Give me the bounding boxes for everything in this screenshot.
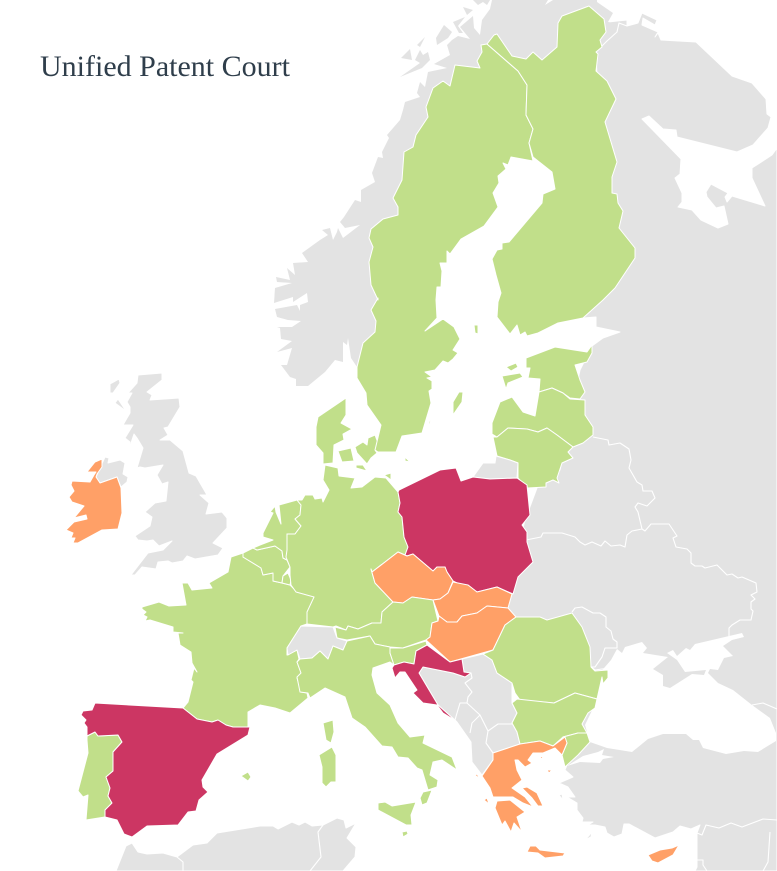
- border: Morocco and Algeria: [177, 857, 183, 871]
- island: Mallorca: [241, 772, 251, 781]
- country: Austria: [335, 597, 438, 648]
- island: Hiiumaa: [506, 363, 518, 371]
- island: Lemnos: [540, 756, 543, 759]
- island: Sicily: [378, 802, 416, 825]
- country: Sweden: [357, 44, 533, 462]
- country: Czech Republic: [371, 552, 453, 603]
- island: Rugen: [384, 473, 391, 480]
- island: Saaremaa: [502, 373, 523, 389]
- island: Rhodes area: [585, 832, 592, 840]
- fjord notch: [545, 0, 553, 5]
- island: Senja group: [453, 17, 465, 33]
- island: Aegean east: [559, 794, 563, 800]
- country: Hungary: [426, 606, 516, 662]
- island: Corfu: [475, 774, 480, 779]
- border: Algeria and Tunisia: [310, 825, 323, 871]
- country: Italy: [297, 636, 457, 825]
- island: Kefalonia: [484, 798, 489, 804]
- island: Corsica: [323, 720, 334, 743]
- border: Moldova: [572, 607, 617, 670]
- country: Finland: [474, 6, 635, 336]
- border: Bosnia and Serbia: [465, 673, 480, 733]
- island: Troms group: [463, 7, 473, 15]
- border: Montenegro: [455, 703, 467, 720]
- country: Romania: [483, 613, 608, 703]
- island: Sardinia: [319, 747, 336, 787]
- Sea of Marmara: [567, 749, 614, 766]
- country: Greece: [475, 737, 567, 858]
- border: Turkey and Caucasus: [752, 703, 777, 709]
- country: Denmark: [316, 398, 381, 471]
- country: Lithuania: [493, 428, 573, 488]
- border: Belarus east: [593, 437, 655, 529]
- island: Bornholm: [405, 457, 410, 462]
- country: Norway: [274, 0, 627, 386]
- island: Hebrides south: [115, 399, 126, 411]
- island: Norwegian coast small: [417, 37, 425, 47]
- country: France: [142, 553, 315, 727]
- island: Zealand: [355, 435, 381, 464]
- region: European Turkey: [562, 733, 590, 767]
- island: Crete: [527, 846, 565, 858]
- region: North Africa: [116, 818, 356, 871]
- region: Western Balkans: [419, 654, 520, 775]
- region: Northern Ireland: [96, 457, 128, 487]
- border: Lebanon: [697, 860, 707, 871]
- country: Ireland: [66, 459, 122, 543]
- country: Cyprus: [648, 845, 679, 863]
- island: Malta: [402, 831, 408, 837]
- region: Calabria tip: [420, 790, 432, 805]
- country: Slovakia: [433, 582, 512, 622]
- border: Albania and Macedonia: [486, 731, 493, 753]
- country: Bulgaria: [512, 693, 597, 746]
- country: Luxembourg: [282, 573, 291, 585]
- region: Kaliningrad: [473, 456, 518, 479]
- region: Peloponnese: [495, 800, 525, 832]
- country: Netherlands: [253, 500, 301, 560]
- island: Finnmark coast: [473, 0, 490, 5]
- country: Slovenia: [390, 641, 427, 665]
- island: Lesbos: [547, 770, 552, 773]
- country: Poland: [398, 468, 533, 594]
- title: Unified Patent Court: [40, 50, 290, 83]
- country: Portugal: [78, 732, 122, 820]
- island: Norwegian coast west: [401, 49, 412, 60]
- island: Funen: [338, 448, 354, 462]
- country: Estonia: [502, 345, 592, 399]
- Black Sea and Sea of Azov: [585, 633, 776, 754]
- country: Croatia: [392, 645, 471, 721]
- country: Germany: [286, 465, 408, 630]
- island: Lofoten group: [436, 25, 452, 45]
- island: Hebrides north: [110, 379, 120, 393]
- island: Aland: [474, 325, 478, 334]
- country: Latvia: [492, 388, 593, 447]
- island: Gotland: [453, 392, 463, 415]
- border: Norway and Russia: [596, 23, 627, 52]
- country: Russia, Ukraine, Belarus and Turkey landmass: [505, 13, 777, 871]
- country: Belgium: [243, 546, 290, 583]
- island: Andros: [545, 806, 548, 811]
- border: Ukraine north: [526, 524, 757, 637]
- country: Switzerland: [287, 626, 347, 659]
- border: Syria and Iraq: [763, 832, 770, 871]
- island: Evia: [522, 787, 543, 806]
- country: Spain: [81, 703, 250, 837]
- country: United Kingdom: [96, 373, 227, 575]
- island: Oland: [427, 414, 433, 432]
- border: Kosovo and Macedonia: [480, 715, 512, 731]
- border: Turkey and Syria: [697, 819, 777, 835]
- island: Norwegian coast group: [400, 50, 430, 77]
- island: Lolland: [356, 465, 367, 471]
